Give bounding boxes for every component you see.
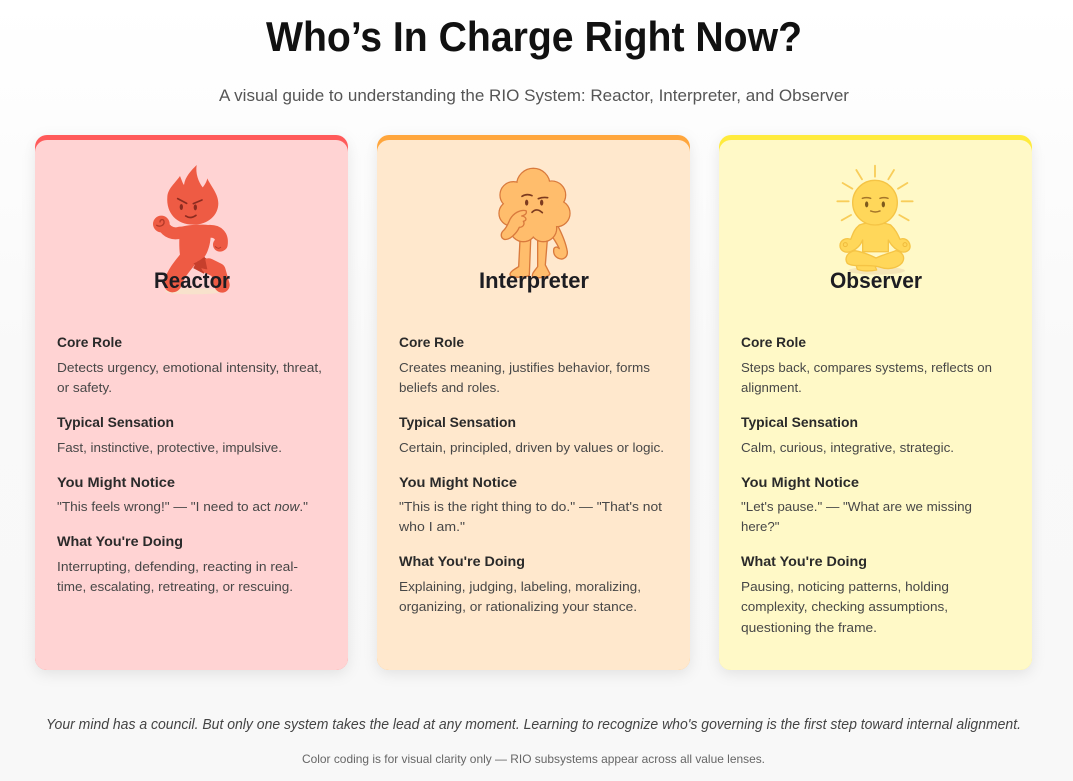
text: what you're doing: What You're Doing <box>399 553 525 569</box>
subtitle: A visual guide to understanding the RIO System: Reactor, Interpreter, and Observer <box>219 86 849 105</box>
text: core role: Steps back, compares systems, reflects on <box>741 360 992 375</box>
text: what you're doing: organizing, or rationalizing your stance. <box>399 599 637 614</box>
text: core role: alignment. <box>741 380 802 395</box>
text: you might notice <box>57 474 308 514</box>
text: core role: or safety. <box>57 380 112 395</box>
text: what you're doing: time, escalating, retreating, or rescuing. <box>57 579 293 594</box>
text: typical sensation: Typical Sensation <box>399 414 516 430</box>
text: you might notice: who I am." <box>398 519 465 534</box>
text: core role: Creates meaning, justifies behavior, forms <box>399 360 650 375</box>
text: what you're doing: complexity, checking assumptions, <box>741 599 948 614</box>
text: core role: Detects urgency, emotional intensity, threat, <box>57 360 322 375</box>
text: typical sensation <box>741 414 954 455</box>
text: you might notice: You Might Notice <box>57 474 175 490</box>
text: what you're doing <box>399 553 641 614</box>
heading: Reactor: Reactor <box>154 268 230 293</box>
panel: Reactor <box>35 135 348 670</box>
title: Who’s In Charge Right Now? <box>266 13 802 60</box>
text: core role <box>741 334 992 395</box>
text: core role: Core Role <box>399 334 464 350</box>
heading: Interpreter: Interpreter <box>479 268 589 293</box>
text: you might notice: You Might Notice <box>399 474 517 490</box>
text: what you're doing: Explaining, judging, labeling, moralizing, <box>399 579 641 594</box>
text: core role: beliefs and roles. <box>399 380 500 395</box>
text: you might notice: "Let's pause." — "What are we missing <box>741 499 972 514</box>
text: what you're doing: What You're Doing <box>57 533 183 549</box>
text: core role: Core Role <box>57 334 122 350</box>
text: typical sensation: Calm, curious, integrative, strategic. <box>741 440 954 455</box>
panel: Interpreter <box>377 135 690 670</box>
text: typical sensation: Typical Sensation <box>57 414 174 430</box>
text: core role <box>57 334 322 395</box>
icon: thinking cloud character <box>499 168 570 278</box>
closing statement: Your mind has a council. But only one system takes the lead at any moment. Learning to recognize who's governing is the first step toward internal alignment. <box>46 717 1021 733</box>
text: what you're doing: Pausing, noticing patterns, holding <box>741 579 949 594</box>
text: you might notice: "This is the right thing to do." — "That's not <box>399 499 662 514</box>
icon: flame character <box>153 165 227 294</box>
text: typical sensation <box>57 414 282 455</box>
text: typical sensation: Certain, principled, driven by values or logic. <box>399 440 664 455</box>
text: typical sensation <box>399 414 664 455</box>
heading: Observer: Observer <box>830 268 922 293</box>
text: you might notice <box>741 474 972 534</box>
text: what you're doing: What You're Doing <box>741 553 867 569</box>
text: you might notice: here?" <box>741 519 780 534</box>
text: typical sensation: Fast, instinctive, protective, impulsive. <box>57 440 282 455</box>
footnote: Color coding is for visual clarity only — RIO subsystems appear across all value lenses. <box>302 752 765 766</box>
text: what you're doing <box>57 533 298 594</box>
text: what you're doing: Interrupting, defending, reacting in real- <box>57 559 298 574</box>
text: you might notice: You Might Notice <box>741 474 859 490</box>
text: core role <box>399 334 650 395</box>
text: core role: Core Role <box>741 334 806 350</box>
text: what you're doing <box>741 553 949 635</box>
text: you might notice: "This feels wrong!" — "I need to act now." <box>57 499 308 514</box>
icon: meditating sun character <box>837 166 913 275</box>
panel: Observer <box>719 135 1032 670</box>
text: typical sensation: Typical Sensation <box>741 414 858 430</box>
text: what you're doing: questioning the frame. <box>741 620 877 635</box>
text: you might notice <box>398 474 662 534</box>
